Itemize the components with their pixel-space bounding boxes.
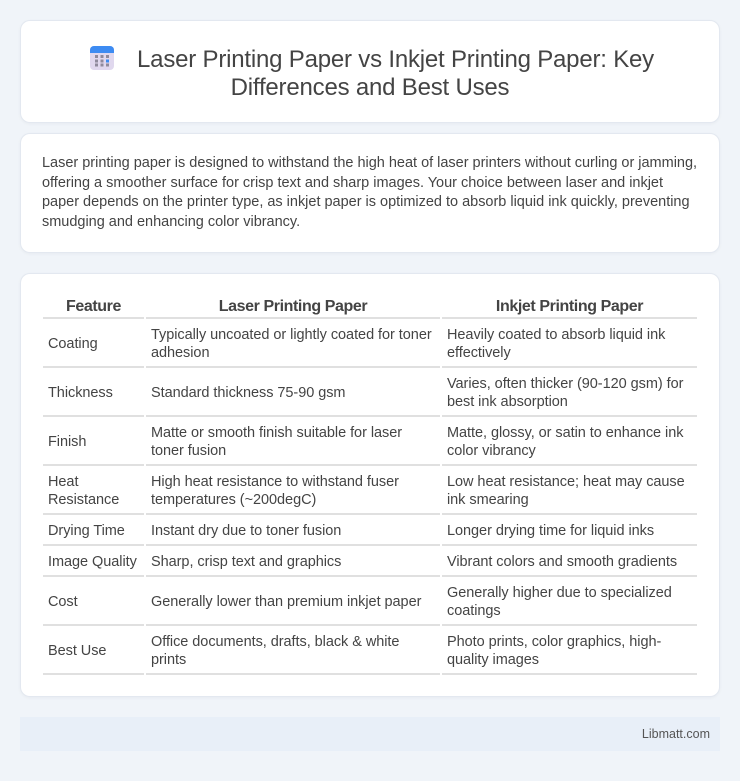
- row: thickness: Varies, often thicker (90-120 gsm) for: [447, 376, 683, 392]
- row: heat resistance: [48, 474, 685, 508]
- row: cost: [48, 585, 672, 619]
- row: drying time: [48, 523, 654, 539]
- table header: [66, 298, 644, 315]
- row: thickness: best ink absorption: [447, 394, 568, 410]
- row: heat resistance: High heat resistance to withstand fuser: [151, 474, 399, 490]
- row: finish: [48, 425, 684, 459]
- row: finish: toner fusion: [151, 443, 226, 459]
- row: coating: adhesion: [151, 345, 209, 361]
- row: image quality: Vibrant colors and smooth gradients: [447, 554, 677, 570]
- text block: introduction: offering a smoother surface for crisp text and sharp images. Your choice between laser and inkjet: [42, 175, 663, 191]
- row: best use: Best Use: [48, 643, 106, 659]
- row: coating: Heavily coated to absorb liquid ink: [447, 327, 665, 343]
- row: drying time: Longer drying time for liquid inks: [447, 523, 654, 539]
- row: image quality: Image Quality: [48, 554, 137, 570]
- row: coating: Typically uncoated or lightly coated for toner: [151, 327, 432, 343]
- panel: comparison table: [20, 273, 720, 697]
- text block: introduction: paper depends on the printer type, as inkjet paper is optimized to absorb liquid ink quickly, preventing: [42, 194, 690, 210]
- title: [137, 46, 654, 101]
- panel: introduction: [20, 133, 720, 253]
- text block: introduction: [42, 155, 697, 230]
- row: coating: Coating: [48, 336, 98, 352]
- row: heat resistance: ink smearing: [447, 492, 529, 508]
- table header: Inkjet Printing Paper: [496, 298, 643, 315]
- row: heat resistance: Low heat resistance; heat may cause: [447, 474, 685, 490]
- table header: Laser Printing Paper: [219, 298, 367, 315]
- row: cost: Generally lower than premium inkjet paper: [151, 594, 421, 610]
- text block: introduction: Laser printing paper is designed to withstand the high heat of laser printers without curling or jamming,: [42, 155, 697, 171]
- row: best use: [48, 634, 661, 668]
- row: finish: Matte, glossy, or satin to enhance ink: [447, 425, 683, 441]
- text block: introduction: smudging and enhancing color vibrancy.: [42, 214, 300, 230]
- row: best use: prints: [151, 652, 186, 668]
- row: finish: Finish: [48, 434, 86, 450]
- row: heat resistance: temperatures (~200degC): [151, 492, 316, 508]
- row: best use: Office documents, drafts, black & white: [151, 634, 399, 650]
- row: image quality: [48, 554, 677, 570]
- icon: calendar: [90, 46, 114, 70]
- row: drying time: Drying Time: [48, 523, 125, 539]
- row: heat resistance: Resistance: [48, 492, 119, 508]
- table header: Feature: [66, 298, 121, 315]
- row: cost: Generally higher due to specialized: [447, 585, 672, 601]
- row: thickness: Standard thickness 75-90 gsm: [151, 385, 345, 401]
- row: coating: effectively: [447, 345, 511, 361]
- footer bar: [20, 717, 720, 751]
- row: best use: Photo prints, color graphics, high-: [447, 634, 661, 650]
- row: coating: [48, 327, 666, 361]
- row: best use: quality images: [447, 652, 539, 668]
- row: image quality: Sharp, crisp text and graphics: [151, 554, 341, 570]
- row: cost: Cost: [48, 594, 78, 610]
- panel: header: [20, 20, 720, 123]
- row: cost: coatings: [447, 603, 501, 619]
- row: finish: color vibrancy: [447, 443, 536, 459]
- title: Differences and Best Uses: [231, 74, 509, 101]
- row: drying time: Instant dry due to toner fusion: [151, 523, 341, 539]
- footer credit: Libmatt.com: [642, 727, 710, 741]
- row: heat resistance: Heat: [48, 474, 78, 490]
- row: thickness: [48, 376, 684, 410]
- title: Laser Printing Paper vs Inkjet Printing Paper: Key: [137, 46, 654, 73]
- row: finish: Matte or smooth finish suitable for laser: [151, 425, 402, 441]
- row: thickness: Thickness: [48, 385, 113, 401]
